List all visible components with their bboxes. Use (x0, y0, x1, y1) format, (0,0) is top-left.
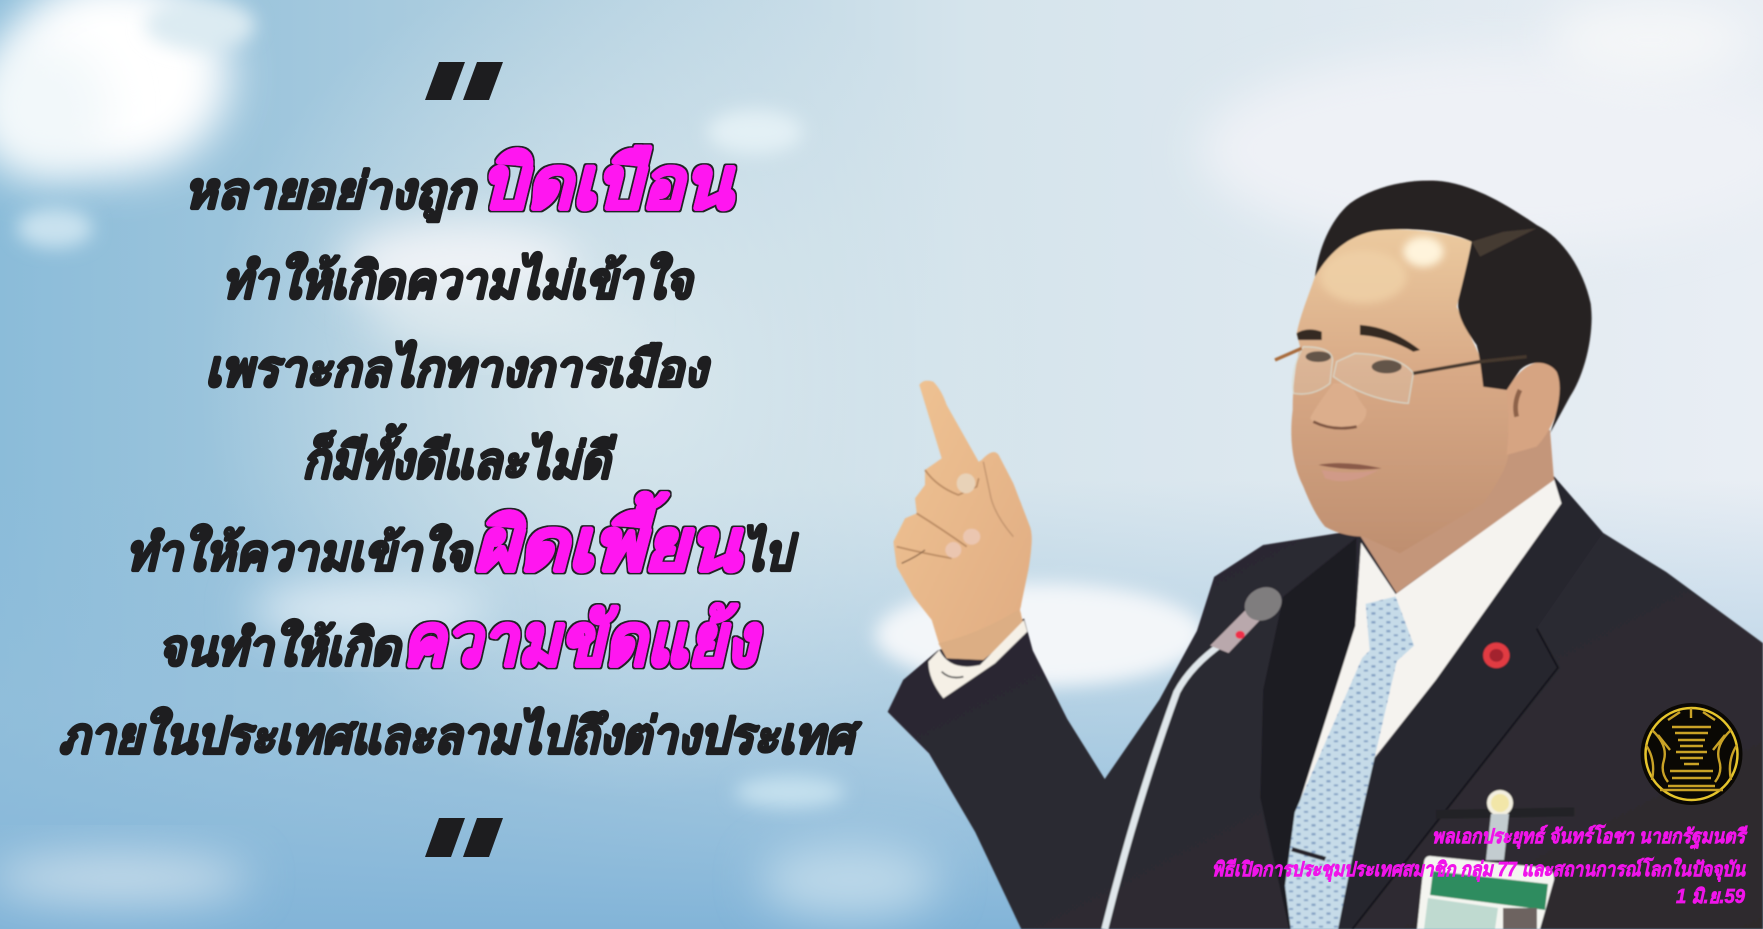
line 5 (126, 492, 798, 586)
tie clip (1292, 849, 1325, 859)
line 5: ไป (742, 524, 798, 581)
suit jacket (888, 476, 1763, 929)
shirt cuff (928, 620, 1027, 698)
line 1 (184, 144, 735, 224)
line 7: ภายในประเทศและลามไปถึงต่างประเทศ (59, 707, 863, 764)
line 6 (158, 601, 762, 681)
ear (1507, 362, 1562, 455)
line 3: เพราะกลไกทางการเมือง (205, 340, 710, 397)
mouth (1318, 463, 1382, 469)
hand pointing up (893, 381, 1032, 698)
eyes (1306, 351, 1331, 362)
quote text (59, 144, 863, 764)
shirt (1295, 479, 1561, 837)
right lapel (1315, 476, 1603, 929)
tie (1285, 597, 1414, 929)
government seal (1640, 703, 1742, 805)
date: 1 มิ.ย.59 (1676, 886, 1746, 908)
line 5: ทำให้ความเข้าใจ (126, 524, 473, 581)
portrait of speaker (888, 181, 1763, 929)
line 4: ก็มีทั้งดีและไม่ดี (302, 424, 617, 489)
caption (1212, 824, 1748, 908)
line 6: ความขัดแย้ง (402, 601, 762, 681)
neck (1350, 430, 1554, 593)
eyebrows (1297, 330, 1322, 340)
glasses (1293, 347, 1413, 403)
line 1: หลายอย่างถูก (184, 163, 478, 222)
pocket and lapel pin (1483, 643, 1510, 668)
hair (1315, 181, 1592, 433)
ID badge and clip (1417, 792, 1554, 929)
microphone (1105, 581, 1289, 929)
face (1291, 230, 1510, 553)
opening quotation mark (425, 62, 503, 100)
line 1: บิดเบือน (481, 144, 735, 224)
closing quotation mark (425, 818, 503, 857)
head and neck (1275, 181, 1592, 593)
line 5: ผิดเพี้ยน (474, 492, 743, 586)
line 6: จนทำให้เกิด (158, 619, 402, 676)
left lapel (1260, 538, 1356, 929)
line 2: ทำให้เกิดความไม่เข้าใจ (222, 252, 694, 309)
nose (1310, 383, 1367, 430)
